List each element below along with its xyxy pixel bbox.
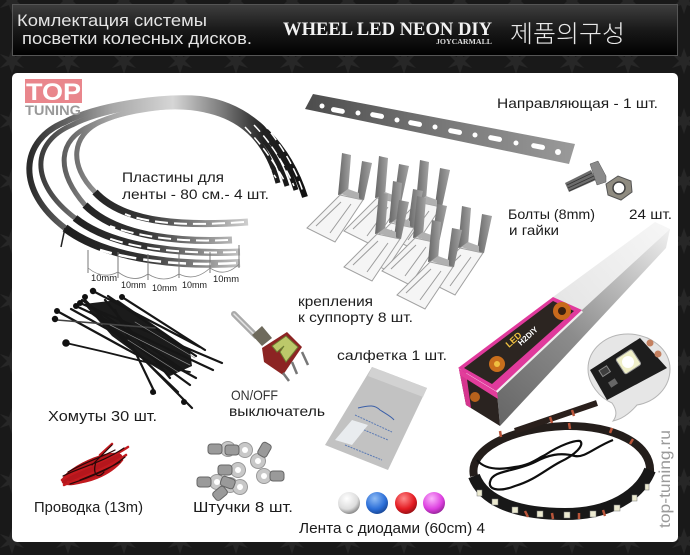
dimension marks with 10mm labels	[88, 245, 239, 293]
dimension marks with 10mm labels: 10mm	[91, 273, 117, 283]
icon: toggle switch	[234, 314, 308, 381]
logo: top tuning: TOP	[26, 79, 81, 106]
heading: product name: JOYCARMALL	[436, 38, 492, 46]
label: LED strip: Лента с диодами (60cm) 4	[299, 521, 485, 537]
label: plates: ленты - 80 см.- 4 шт.	[122, 186, 269, 202]
label: cable ties: Хомуты 30 шт.	[48, 409, 157, 425]
header bar	[12, 4, 678, 56]
box lettering: H2DIY	[516, 325, 540, 347]
colour swatches	[338, 492, 445, 514]
label: bolts and nuts: и гайки	[509, 222, 559, 238]
icon: bolt and nut	[565, 161, 632, 200]
label: switch	[229, 387, 325, 419]
label: terminals: Штучки 8 шт.	[193, 500, 293, 516]
icon: cable ties	[52, 288, 222, 408]
heading: russian title	[17, 12, 252, 48]
logo: top tuning	[25, 79, 82, 118]
icon: red wire bundle	[58, 444, 128, 492]
label: bolts and nuts: Болты (8mm)	[508, 206, 595, 222]
dimension marks with 10mm labels: 10mm	[121, 280, 146, 290]
icon: ring terminals	[197, 440, 284, 504]
icon: LED strip coil	[473, 403, 650, 519]
icon: wipe sachet	[325, 367, 427, 470]
heading: product name: WHEEL LED NEON DIY	[283, 19, 492, 40]
label: plates: Пластины для	[122, 169, 224, 185]
label: switch: ON/OFF	[231, 387, 278, 403]
icon: magnified LED callout	[588, 334, 670, 421]
icon: product box	[458, 222, 670, 426]
box lettering	[504, 325, 540, 349]
watermark: top-tuning.ru	[657, 430, 674, 528]
label: bolts and nuts	[508, 206, 672, 238]
label: switch: выключатель	[229, 403, 325, 419]
heading: russian title: Комлектация системы	[17, 12, 207, 30]
heading: russian title: посветки колесных дисков.	[22, 30, 252, 48]
dimension marks with 10mm labels: 10mm	[182, 280, 207, 290]
label: wipe: салфетка 1 шт.	[337, 347, 447, 363]
label: bolts and nuts: 24 шт.	[629, 206, 672, 222]
dimension marks with 10mm labels: 10mm	[152, 283, 177, 293]
label: plates	[122, 169, 269, 202]
box lettering: LED	[504, 330, 524, 349]
label: guide rail: Направляющая - 1 шт.	[497, 95, 658, 111]
label: caliper mounts	[298, 293, 413, 325]
logo: top tuning: TUNING	[25, 102, 81, 118]
icon: mounting brackets	[307, 153, 492, 309]
label: caliper mounts: крепления	[298, 293, 373, 309]
label: wiring: Проводка (13m)	[34, 500, 143, 516]
heading: korean title: 제품의구성	[510, 21, 625, 48]
label: caliper mounts: к суппорту 8 шт.	[298, 309, 413, 325]
connection wire	[477, 440, 613, 489]
dimension marks with 10mm labels: 10mm	[213, 274, 239, 284]
icon: guide rail	[305, 94, 575, 164]
icon: led strip plates rings	[29, 98, 305, 264]
